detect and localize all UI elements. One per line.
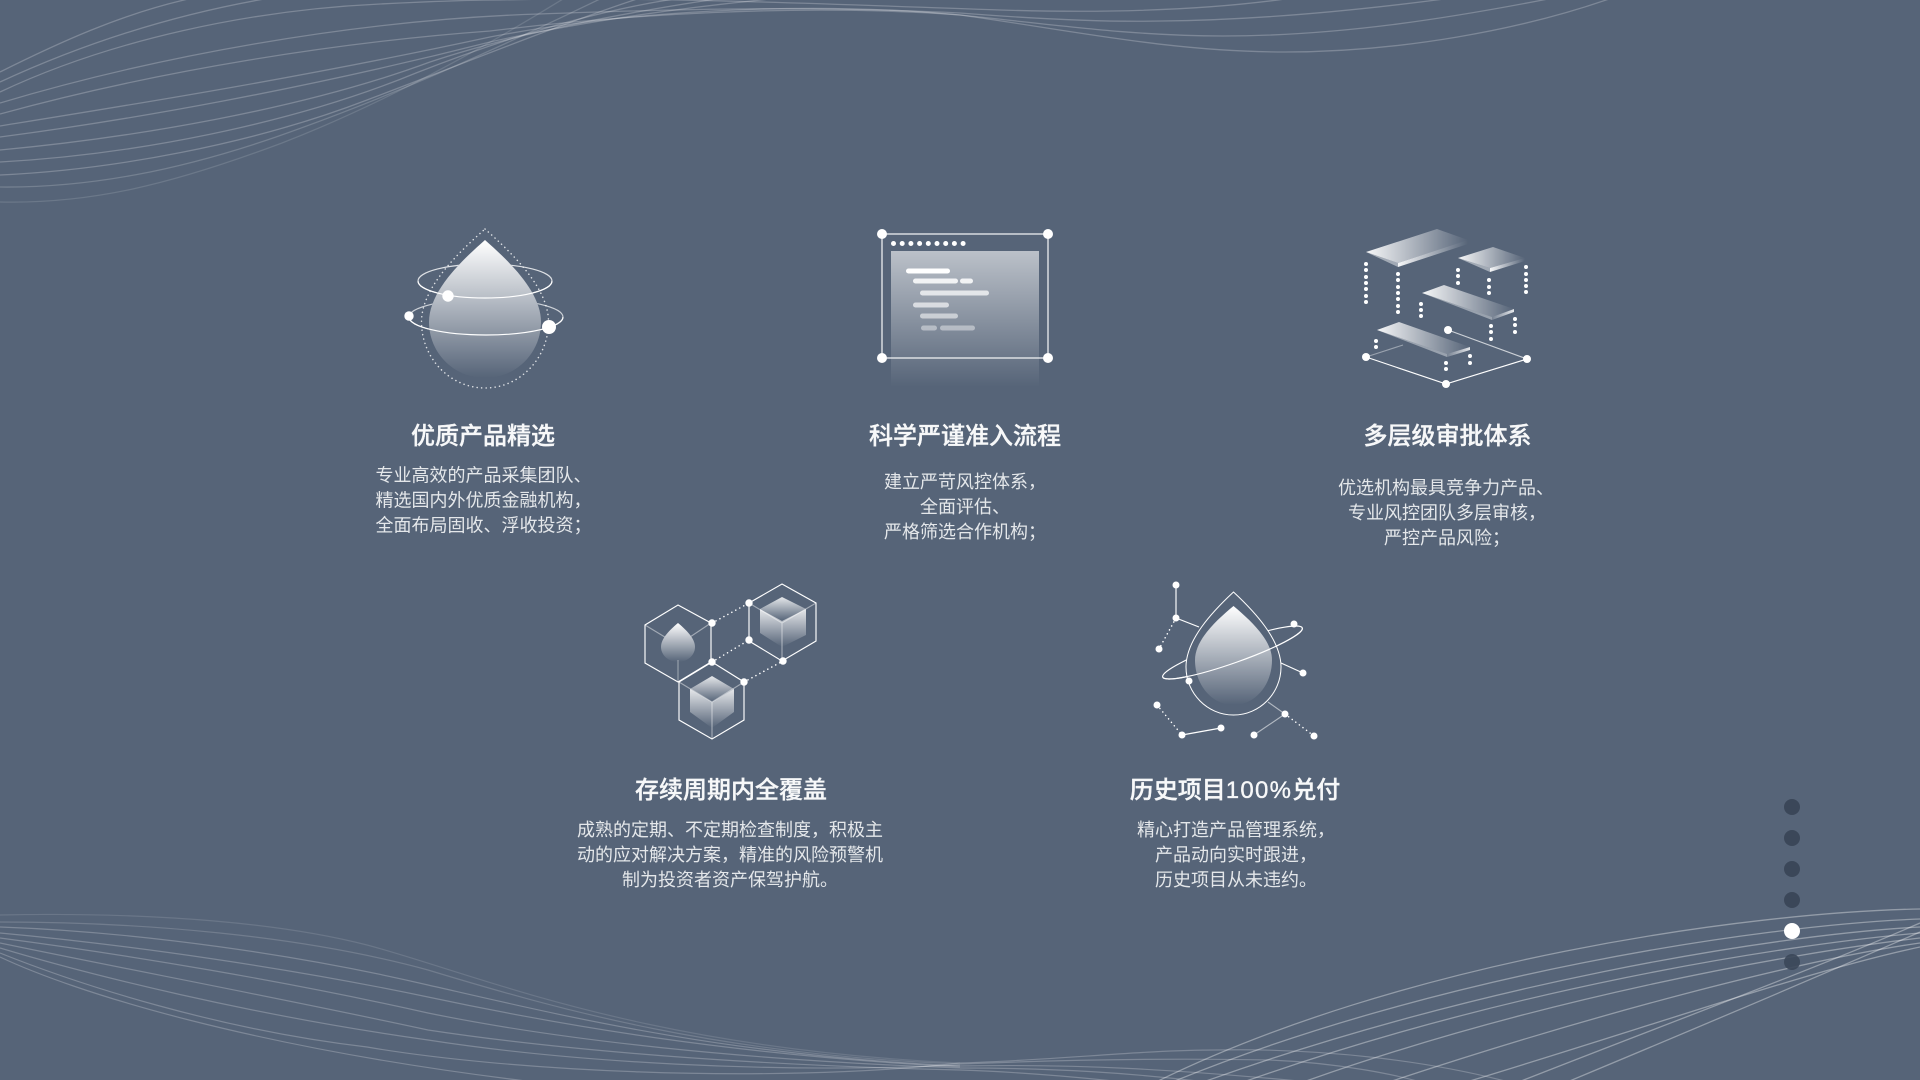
icon: water drop with orbits — [404, 229, 563, 388]
heading: 历史项目100%兑付 — [1130, 777, 1340, 804]
heading: 优质产品精选 — [411, 423, 555, 450]
icon: code window — [877, 229, 1053, 387]
icon: stacked isometric plates — [1362, 229, 1531, 388]
panel: quality product selection — [376, 229, 592, 536]
text block: 成熟的定期、不定期检查制度，积极主 — [577, 820, 883, 840]
text block: 精心打造产品管理系统， — [1137, 820, 1335, 840]
panel: multi-level approval system — [1338, 229, 1554, 548]
text block: 精选国内外优质金融机构， — [376, 490, 592, 510]
heading: 科学严谨准入流程 — [869, 423, 1061, 450]
text block: 全面布局固收、浮收投资； — [376, 516, 592, 536]
text block: 产品动向实时跟进， — [1155, 845, 1317, 865]
text block: 严控产品风险； — [1384, 528, 1510, 548]
text block: 严格筛选合作机构； — [884, 522, 1046, 542]
icon: water drop with network — [1154, 582, 1318, 740]
text block: 专业风控团队多层审核， — [1348, 503, 1546, 523]
page navigation dots — [1784, 799, 1800, 970]
text block: 专业高效的产品采集团队、 — [376, 466, 592, 486]
text block: 动的应对解决方案，精准的风险预警机 — [577, 845, 883, 865]
text block: 全面评估、 — [920, 497, 1010, 517]
panel: historical projects fully paid — [1130, 582, 1340, 890]
text block: 建立严苛风控体系， — [884, 472, 1046, 492]
heading: 多层级审批体系 — [1364, 423, 1532, 450]
panel: full lifecycle coverage — [577, 584, 883, 890]
heading: 存续周期内全覆盖 — [635, 777, 827, 804]
text block: 优选机构最具竞争力产品、 — [1338, 478, 1554, 498]
text block: 制为投资者资产保驾护航。 — [622, 870, 838, 890]
icon: hexagon cubes network — [645, 584, 816, 739]
panel: rigorous admission process — [869, 229, 1061, 542]
text block: 历史项目从未违约。 — [1155, 870, 1317, 890]
